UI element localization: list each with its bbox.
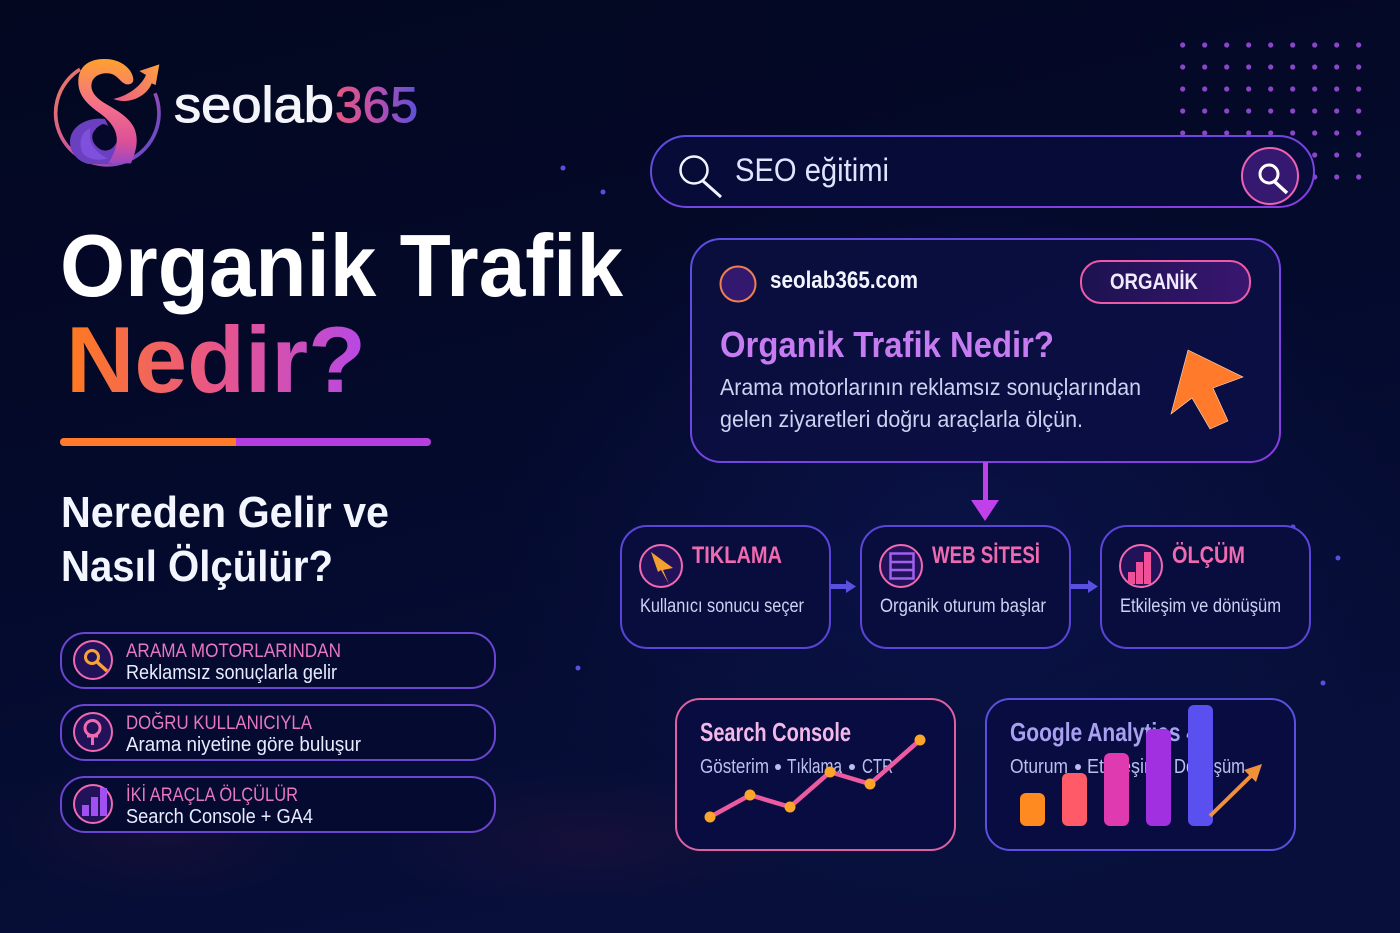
metrics text: Dönüşüm	[1174, 756, 1245, 778]
panel: search console	[676, 699, 955, 850]
card body text: Arama motorlarının reklamsız sonuçlarından	[720, 374, 1141, 400]
line chart	[704, 734, 926, 822]
arrow: tıklama to web sitesi	[830, 580, 856, 593]
site url: seolab365.com	[770, 267, 918, 294]
badge: organik: ORGANİK	[1110, 269, 1198, 294]
bar chart	[1020, 705, 1213, 826]
feature row: arama motorlarından: ARAMA MOTORLARINDAN	[126, 641, 341, 662]
metrics text: CTR	[862, 756, 893, 778]
search button	[1242, 148, 1298, 204]
subtitle	[61, 488, 389, 591]
metrics text	[1010, 756, 1245, 778]
feature row: iki araçla ölçülür: Search Console + GA4	[126, 806, 313, 828]
title	[60, 216, 624, 412]
step: tıklama: Kullanıcı sonucu seçer	[640, 596, 805, 617]
result card	[691, 239, 1280, 462]
step: tıklama	[621, 526, 830, 648]
badge: organik	[1081, 261, 1250, 303]
card heading: Organik Trafik Nedir?	[720, 324, 1054, 365]
arrow: web sitesi to ölçüm	[1070, 580, 1098, 593]
logo wordmark: seolab	[174, 77, 334, 133]
logo icon: S with arrow	[56, 59, 159, 165]
panel: google analytics 4: Google Analytics 4	[1010, 717, 1198, 747]
feature row: doğru kullanıcıyla: Arama niyetine göre buluşur	[126, 734, 361, 756]
growth arrow	[1210, 764, 1262, 816]
search bar: SEO eğitimi	[735, 152, 889, 188]
metrics text: Oturum	[1010, 756, 1068, 778]
title: Organik Trafik	[60, 216, 624, 315]
step: web sitesi: WEB SİTESİ	[932, 542, 1040, 569]
feature row: doğru kullanıcıyla: DOĞRU KULLANICIYLA	[126, 712, 312, 734]
feature row: arama motorlarından: Reklamsız sonuçlarla gelir	[126, 662, 337, 684]
title: Nedir?	[66, 307, 366, 412]
icon: search	[680, 156, 721, 197]
logo	[56, 59, 418, 165]
step: ölçüm: Etkileşim ve dönüşüm	[1120, 596, 1281, 617]
favicon	[720, 266, 756, 302]
step: web sitesi: Organik oturum başlar	[880, 596, 1047, 617]
logo wordmark	[174, 77, 418, 133]
title divider	[60, 438, 431, 446]
arrow: card to steps	[971, 462, 999, 521]
feature row: doğru kullanıcıyla	[61, 705, 495, 760]
panel: google analytics 4	[986, 699, 1295, 850]
feature row: iki araçla ölçülür: İKİ ARAÇLA ÖLÇÜLÜR	[126, 785, 298, 806]
step: web sitesi	[861, 526, 1070, 648]
card body text: gelen ziyaretleri doğru araçlarla ölçün.	[720, 406, 1083, 432]
logo wordmark: 365	[335, 77, 418, 133]
dot grid decoration	[560, 42, 1361, 685]
metrics text: Etkileşim	[1087, 756, 1159, 778]
icon: cursor	[1171, 350, 1243, 429]
step: ölçüm: ÖLÇÜM	[1172, 542, 1245, 569]
step: ölçüm	[1101, 526, 1310, 648]
icon: magnifier	[74, 641, 112, 679]
icon: target pin	[74, 713, 112, 751]
step: tıklama: TIKLAMA	[692, 542, 782, 569]
icon: bars	[74, 785, 112, 823]
metrics text: Gösterim	[700, 756, 769, 778]
icon: bars	[1120, 545, 1162, 587]
metrics text: Tıklama	[787, 756, 843, 778]
panel: search console: Search Console	[700, 717, 851, 747]
card body text	[720, 374, 1141, 432]
icon: cursor	[640, 545, 682, 587]
icon: page	[880, 545, 922, 587]
feature row: arama motorlarından	[61, 633, 495, 688]
feature row: iki araçla ölçülür	[61, 777, 495, 832]
search bar	[651, 136, 1314, 207]
subtitle: Nereden Gelir ve	[61, 488, 389, 537]
metrics text	[700, 756, 893, 778]
subtitle: Nasıl Ölçülür?	[61, 542, 333, 591]
